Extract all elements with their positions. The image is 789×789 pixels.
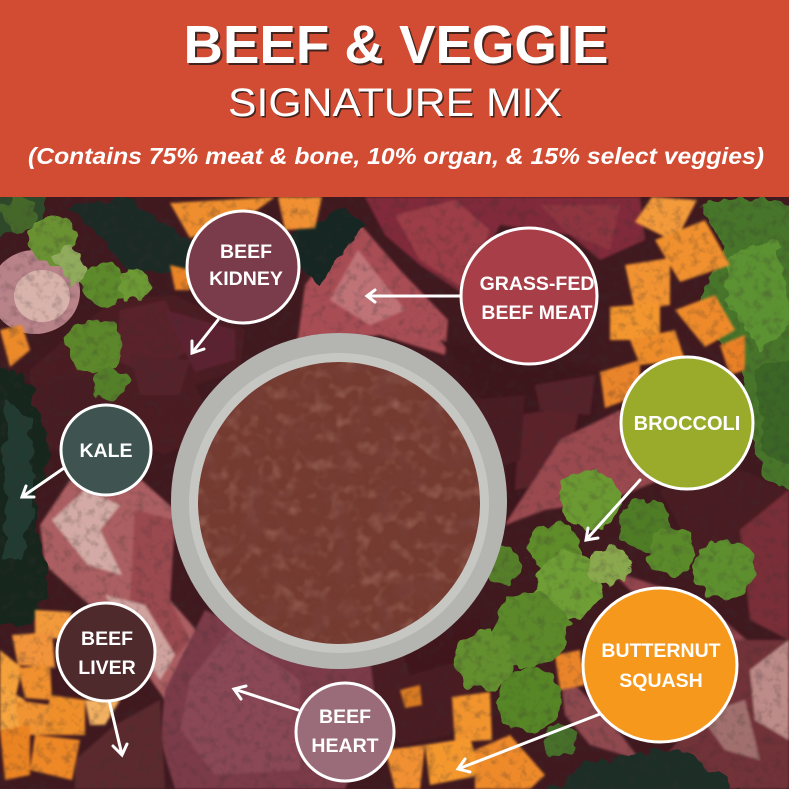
header band: SIGNATURE MIX <box>228 81 562 125</box>
arrow: beef liver <box>109 700 127 755</box>
kale bottom <box>545 748 745 789</box>
composition note: (Contains 75% meat & bone, 10% organ, & 15% select veggies) <box>28 143 764 169</box>
broccoli top left <box>0 197 151 402</box>
callout: beef kidney: KIDNEY <box>209 268 283 290</box>
callout: beef liver: LIVER <box>78 657 136 679</box>
kale left <box>0 362 50 625</box>
callout: broccoli: BROCCOLI <box>634 413 740 435</box>
callout: butternut squash: SQUASH <box>619 670 703 692</box>
arrow: grass-fed beef meat <box>367 290 462 302</box>
title: BEEF & VEGGIE <box>186 17 610 77</box>
callout: grass-fed beef meat: GRASS-FED <box>480 273 594 295</box>
photo texture <box>0 197 789 789</box>
beef heart <box>160 610 480 789</box>
callout: kale: KALE <box>79 440 133 462</box>
callout: beef liver: BEEF <box>81 628 133 650</box>
callout: beef liver <box>57 603 155 701</box>
arrow: butternut squash <box>458 714 600 772</box>
turnip left <box>0 250 80 334</box>
arrow: beef heart <box>234 686 298 710</box>
callout: grass-fed beef meat: BEEF MEAT <box>481 302 593 324</box>
broccoli right <box>455 470 755 756</box>
header band <box>0 0 789 197</box>
callout: butternut squash <box>583 588 737 742</box>
callout: butternut squash: BUTTERNUT <box>601 640 721 662</box>
photo background: raw ingredients <box>0 192 789 789</box>
butternut squash cubes bottom <box>385 650 585 789</box>
arrow: broccoli <box>586 480 640 540</box>
curly kale right <box>700 197 789 490</box>
callout: beef heart: BEEF <box>319 706 371 728</box>
bowl food <box>198 362 480 644</box>
beef kidney pieces <box>30 295 245 455</box>
callout: beef heart: HEART <box>311 735 379 757</box>
arrow: beef kidney <box>192 320 218 353</box>
right meat <box>560 470 789 789</box>
subtitle: SIGNATURE MIX <box>230 82 564 126</box>
beef liver bottom left <box>75 700 165 789</box>
callout: beef kidney: BEEF <box>220 241 272 263</box>
bowl <box>171 333 507 669</box>
callout: grass-fed beef meat <box>461 228 597 364</box>
callout: kale <box>61 405 151 495</box>
header band: BEEF & VEGGIE <box>184 15 608 75</box>
arrow: kale <box>22 468 64 497</box>
marbled beef left <box>40 470 205 700</box>
callout: beef heart <box>296 683 394 781</box>
butternut squash cubes top right <box>170 197 745 408</box>
grass-fed beef meat <box>297 197 660 530</box>
kale top <box>70 197 190 275</box>
callout: beef kidney <box>187 211 299 323</box>
callout: broccoli <box>621 357 753 489</box>
butternut squash cubes left <box>0 325 120 780</box>
